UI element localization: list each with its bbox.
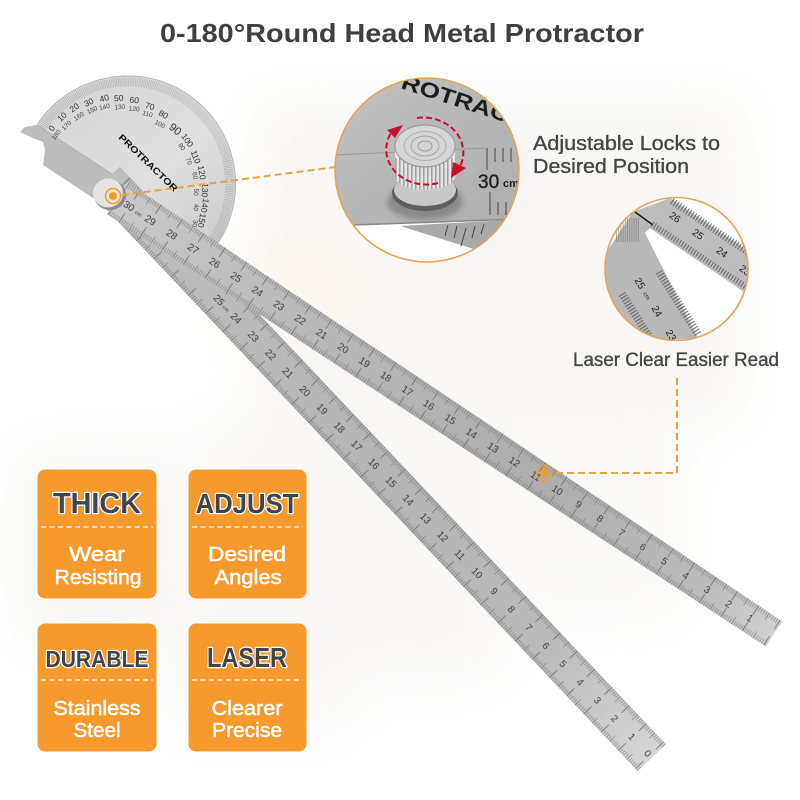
ruler: lower arm: 12 [434, 529, 450, 545]
ruler: upper arm: 8 [594, 513, 605, 526]
card: laser [188, 623, 307, 752]
ruler: upper arm: 9 [573, 499, 584, 512]
degree numerals: 20 [68, 101, 81, 114]
scale label: 30 [478, 172, 499, 193]
detail circle: laser scale: 23 [737, 263, 753, 279]
ruler: upper arm: 21 [314, 327, 329, 343]
degree numerals: 40 [98, 92, 110, 104]
ruler: lower arm: 4 [574, 677, 586, 689]
ruler: lower arm: 0 [641, 748, 653, 760]
degree numerals: 130 [199, 183, 210, 198]
ruler: lower arm: 11 [452, 548, 467, 563]
ruler: upper arm: 24 [249, 284, 265, 300]
degree numerals: 50 [114, 93, 124, 103]
degree numerals: 110 [189, 149, 203, 165]
ruler: upper arm: 6 [637, 542, 648, 554]
degree numerals [46, 92, 211, 229]
ruler: lower arm [91, 167, 666, 771]
ruler: lower arm: 17 [348, 438, 364, 454]
card: thick: THICK [53, 488, 141, 520]
ruler: upper arm: 30 [121, 199, 136, 215]
ruler: upper arm: 10 [549, 483, 565, 499]
ruler: upper arm: 2 [723, 599, 734, 611]
ruler: lower arm: 9 [488, 586, 500, 598]
ruler: lower arm: 21 [279, 366, 295, 382]
ruler: lower arm: cm [220, 305, 230, 314]
ruler: upper arm: 12 [506, 455, 522, 470]
degree numerals: 80 [157, 108, 170, 121]
degree numerals: 170 [61, 119, 74, 132]
label: laser clear: Laser Clear Easier Read [573, 350, 779, 371]
card: durable: Steel [74, 719, 120, 742]
ruler: lower arm: 8 [505, 604, 517, 616]
protractor engraved name: PROTRACTOR [117, 132, 180, 194]
ruler: upper arm: 17 [399, 384, 415, 399]
ruler: upper arm: 4 [680, 570, 691, 583]
detail circle: laser scale: 25 [632, 276, 647, 292]
ruler: upper arm: 19 [356, 355, 372, 371]
pivot knob with orange marker [93, 178, 126, 210]
degree numerals: 140 [199, 198, 211, 214]
degree numerals: 150 [196, 213, 208, 229]
detail circle: laser scale: 23 [663, 328, 678, 344]
semicircular plate [37, 76, 236, 243]
detail circle: laser scale: 24 [714, 245, 730, 261]
card: thick [37, 469, 157, 599]
engraved lettering: ROTRAC [398, 71, 512, 127]
card: durable: DURABLE [46, 646, 148, 672]
degree numerals: 70 [144, 100, 156, 112]
ruler: upper arm: 27 [185, 242, 201, 257]
degree numerals: 80 [176, 142, 186, 152]
title: 0-180°Round Head Metal Protractor [160, 18, 644, 48]
degree numerals: 150 [86, 105, 99, 116]
ruler: upper arm: 13 [485, 441, 501, 456]
card: durable: Stainless [54, 697, 140, 720]
arrow: dashed leader to lock detail [122, 167, 336, 195]
degree numerals: 60 [129, 95, 140, 105]
degree numerals: 40 [191, 203, 200, 212]
degree numerals: 130 [114, 104, 126, 111]
degree numerals: 90 [166, 121, 183, 138]
detail circle: laser scale: 26 [667, 210, 683, 226]
detail circle: laser scale [600, 195, 755, 345]
ruler: lower arm: 20 [296, 384, 312, 400]
degree numerals: 30 [190, 219, 199, 228]
ruler: upper arm: 28 [164, 228, 179, 243]
degree scale ticks [42, 82, 230, 240]
ruler: lower arm: 15 [383, 475, 398, 491]
ruler: lower arm: 25 [210, 293, 226, 309]
degree numerals: 160 [73, 111, 86, 123]
card: laser: LASER [207, 642, 287, 673]
ruler: lower arm: 16 [365, 457, 381, 473]
degree numerals: 100 [153, 119, 166, 130]
ruler: upper arm: 18 [378, 370, 393, 385]
degree numerals: 180 [51, 128, 63, 142]
ruler: upper arm: 5 [658, 556, 670, 568]
ruler: lower arm: 18 [331, 420, 347, 436]
base plate [20, 125, 130, 198]
ruler: lower arm: 1 [625, 732, 637, 743]
ruler: upper arm: 7 [616, 527, 627, 540]
label: adjustable locks: Adjustable Locks to [533, 133, 720, 155]
card: laser: Clearer [212, 697, 283, 720]
label: adjustable locks [533, 133, 720, 178]
degree numerals: 60 [190, 172, 199, 180]
protractor head [20, 76, 236, 243]
degree numerals: 0 [46, 123, 57, 133]
degree numerals: 120 [128, 106, 140, 113]
arrow: dashed leader to ruler marker [553, 378, 677, 473]
ruler: upper arm: 11 [528, 469, 543, 484]
ruler: lower arm: 6 [539, 641, 551, 653]
ruler: lower arm: 19 [314, 402, 330, 418]
degree numerals: 30 [82, 96, 95, 109]
detail circle: locking knob [334, 77, 520, 263]
degree numerals: 120 [196, 165, 208, 181]
degree numerals: 50 [192, 188, 199, 196]
ruler: upper arm: 20 [335, 341, 351, 357]
ruler: lower arm: 5 [556, 659, 569, 671]
ruler: lower arm: 14 [400, 493, 416, 509]
card: adjust [188, 469, 307, 599]
card: adjust: ADJUST [196, 488, 298, 519]
ruler: lower arm: 3 [591, 695, 603, 707]
ruler: upper arm: 14 [463, 426, 479, 442]
degree numerals: 110 [141, 110, 154, 119]
card: thick: Resisting [54, 566, 142, 589]
card: durable [37, 623, 157, 752]
ruler: upper arm: 23 [271, 299, 286, 314]
ruler: lower arm: 24 [228, 311, 244, 327]
ruler: upper arm: 26 [206, 256, 222, 272]
detail circle: locking knob: cm [503, 178, 519, 190]
card: thick: Wear [69, 543, 125, 566]
ruler: lower arm: 10 [469, 566, 484, 582]
degree numerals: 10 [55, 110, 69, 124]
ruler: upper arm: 25 [228, 270, 244, 286]
ruler: lower arm: 22 [262, 347, 278, 363]
ruler: upper arm: 1 [744, 613, 755, 625]
ruler: upper arm: 29 [142, 213, 158, 229]
detail circle: laser scale: 24 [649, 304, 664, 320]
ruler: lower arm: 7 [522, 622, 534, 634]
degree numerals: 70 [184, 157, 193, 166]
card: adjust: Desired [208, 543, 286, 566]
ruler: upper arm: 22 [292, 313, 308, 328]
ruler: upper arm: 3 [701, 584, 712, 597]
knob [387, 184, 463, 220]
ruler: upper arm: cm [133, 210, 143, 219]
card: adjust: Angles [214, 566, 282, 589]
degree numerals: 100 [179, 132, 196, 149]
ruler: lower arm: 23 [245, 329, 261, 345]
ruler: lower arm: 2 [608, 713, 620, 725]
ruler: upper arm: 15 [442, 412, 458, 428]
red rotation arrows [417, 118, 463, 170]
card: laser: Precise [212, 719, 282, 742]
detail circle: laser scale: cm [641, 292, 650, 301]
ruler: upper arm [107, 182, 784, 650]
ruler: lower arm: 13 [417, 511, 433, 527]
label: adjustable locks: Desired Position [533, 156, 689, 178]
degree numerals: 140 [98, 103, 111, 112]
detail circle: laser scale: 25 [690, 227, 706, 243]
ruler: upper arm: 16 [421, 398, 436, 414]
ruler marker [536, 466, 552, 480]
